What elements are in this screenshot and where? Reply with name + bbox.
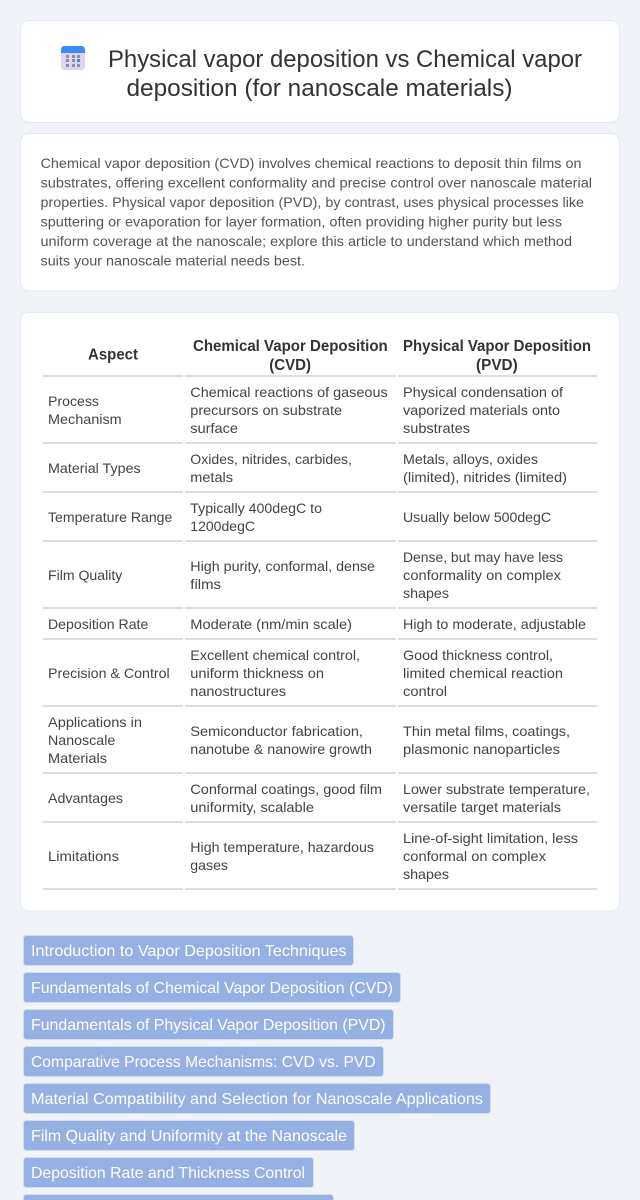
row: Applications in Nanoscale Materials: Applications in: [48, 714, 142, 730]
row: Process Mechanism: vaporized materials onto: [403, 402, 560, 418]
row: Advantages: Conformal coatings, good film: [190, 781, 382, 797]
row: Process Mechanism: Physical condensation of: [403, 384, 563, 400]
tag: Fundamentals of PVD: [24, 1010, 394, 1040]
row: Limitations: Line-of-sight limitation, less: [403, 830, 578, 846]
row: Deposition Rate: Deposition Rate: [48, 616, 149, 632]
row: Process Mechanism: [43, 384, 597, 444]
tag: Deposition Rate: Deposition Rate and Thickness Control: [31, 1165, 305, 1182]
row: Process Mechanism: precursors on substrate: [190, 402, 342, 418]
text block: summary paragraph: Chemical vapor deposition (CVD) involves chemical reactions to deposit thin films on: [40, 155, 581, 171]
tag: Film Quality: Film Quality and Uniformity at the Nanoscale: [31, 1128, 347, 1145]
row: Limitations: Limitations: [48, 848, 119, 864]
row: Precision & Control: [43, 647, 597, 707]
tag: cut off at page edge: [24, 1194, 334, 1200]
row: Material Types: Metals, alloys, oxides: [403, 451, 538, 467]
row: Limitations: [43, 830, 597, 890]
row: Precision & Control: uniform thickness on: [190, 665, 324, 681]
panel: title card: [20, 20, 620, 122]
row: Material Types: (limited), nitrides (limited): [403, 469, 567, 485]
row: Precision & Control: nanostructures: [190, 683, 286, 699]
row: Applications in Nanoscale Materials: plasmonic nanoparticles: [403, 741, 560, 757]
row: Temperature Range: Typically 400degC to: [190, 500, 322, 516]
row: Temperature Range: Usually below 500degC: [403, 509, 551, 525]
row: Process Mechanism: Chemical reactions of gaseous: [190, 384, 388, 400]
row: Material Types: Oxides, nitrides, carbides,: [190, 451, 352, 467]
tag: Fundamentals of CVD: Fundamentals of Chemical Vapor Deposition (CVD): [31, 980, 393, 997]
text block: summary paragraph: [40, 155, 592, 268]
tag: Film Quality: [24, 1120, 354, 1150]
row: Advantages: [43, 781, 597, 823]
tag: Comparative Process Mechanisms: Comparative Process Mechanisms: CVD vs. PVD: [31, 1054, 376, 1071]
row: Limitations: conformal on complex: [403, 848, 546, 864]
row: Material Types: metals: [190, 469, 233, 485]
row: Film Quality: High purity, conformal, dense: [190, 558, 375, 574]
tag: Comparative Process Mechanisms: [24, 1046, 384, 1076]
row: Precision & Control: limited chemical reaction: [403, 665, 563, 681]
row: Deposition Rate: High to moderate, adjustable: [403, 616, 586, 632]
list: table of contents tags: [24, 936, 490, 1200]
row: Process Mechanism: surface: [190, 420, 238, 436]
row: Material Types: Material Types: [48, 460, 141, 476]
text block: summary paragraph: uniform coverage at the nanoscale; explore this article to understand which method: [40, 233, 572, 249]
row: Deposition Rate: [43, 616, 597, 640]
tag: Fundamentals of CVD: [24, 972, 400, 1002]
row: Temperature Range: Temperature Range: [48, 509, 173, 525]
row: Temperature Range: [43, 500, 597, 542]
table header: [43, 338, 597, 377]
row: Film Quality: shapes: [403, 585, 449, 601]
row: Applications in Nanoscale Materials: Thin metal films, coatings,: [403, 723, 570, 739]
row: Film Quality: [43, 549, 597, 609]
table header: Physical Vapor Deposition: [403, 338, 591, 355]
row: Applications in Nanoscale Materials: [43, 714, 597, 774]
text block: summary paragraph: suits your nanoscale material needs best.: [40, 252, 305, 268]
tag: Introduction: [24, 936, 354, 966]
row: Advantages: uniformity, scalable: [190, 799, 314, 815]
tag: Material Compatibility: [24, 1084, 490, 1114]
row: Limitations: High temperature, hazardous: [190, 839, 374, 855]
tag: Material Compatibility: Material Compatibility and Selection for Nanoscale Applications: [31, 1091, 483, 1108]
row: Advantages: Lower substrate temperature,: [403, 781, 590, 797]
tag: Introduction: Introduction to Vapor Deposition Techniques: [31, 943, 347, 960]
row: Precision & Control: Precision & Control: [48, 665, 170, 681]
row: Material Types: [43, 451, 597, 493]
title: deposition (for nanoscale materials): [126, 75, 512, 102]
row: Applications in Nanoscale Materials: Nanoscale: [48, 732, 116, 748]
panel: introduction text: [20, 134, 620, 291]
row: Film Quality: films: [190, 576, 221, 592]
row: Applications in Nanoscale Materials: Semiconductor fabrication,: [190, 723, 363, 739]
title: Physical vapor deposition vs Chemical vapor: [108, 46, 582, 73]
title: [108, 46, 582, 102]
text block: summary paragraph: substrates, offering excellent conformality and precise control over nanoscale material: [40, 174, 592, 190]
tag: Fundamentals of PVD: Fundamentals of Physical Vapor Deposition (PVD): [31, 1017, 386, 1034]
row: Advantages: Advantages: [48, 790, 123, 806]
row: Deposition Rate: Moderate (nm/min scale): [190, 616, 352, 632]
table header: (CVD): [269, 357, 311, 374]
table header: Aspect: [88, 346, 139, 364]
text block: summary paragraph: sputtering or evaporation for layer formation, often providing higher purity but less: [40, 214, 562, 230]
panel: comparison table: [20, 312, 620, 911]
text block: summary paragraph: properties. Physical vapor deposition (PVD), by contrast, uses physical processes like: [40, 194, 584, 210]
row: Film Quality: Dense, but may have less: [403, 549, 563, 565]
row: Film Quality: conformality on complex: [403, 567, 561, 583]
tag: Deposition Rate: [24, 1158, 314, 1188]
row: Applications in Nanoscale Materials: nanotube & nanowire growth: [190, 741, 372, 757]
table header: Chemical Vapor Deposition: [193, 338, 388, 355]
table header: (PVD): [476, 357, 518, 374]
row: Process Mechanism: Process: [48, 393, 99, 409]
row: Process Mechanism: substrates: [403, 420, 470, 436]
row: Film Quality: Film Quality: [48, 567, 122, 583]
row: Limitations: gases: [190, 857, 228, 873]
row: Process Mechanism: Mechanism: [48, 411, 122, 427]
row: Precision & Control: control: [403, 683, 447, 699]
row: Precision & Control: Excellent chemical control,: [190, 647, 360, 663]
row: Temperature Range: 1200degC: [190, 518, 255, 534]
row: Limitations: shapes: [403, 866, 449, 882]
row: Precision & Control: Good thickness control,: [403, 647, 553, 663]
icon: calendar: [61, 46, 85, 70]
row: Applications in Nanoscale Materials: Materials: [48, 750, 107, 766]
row: Advantages: versatile target materials: [403, 799, 561, 815]
